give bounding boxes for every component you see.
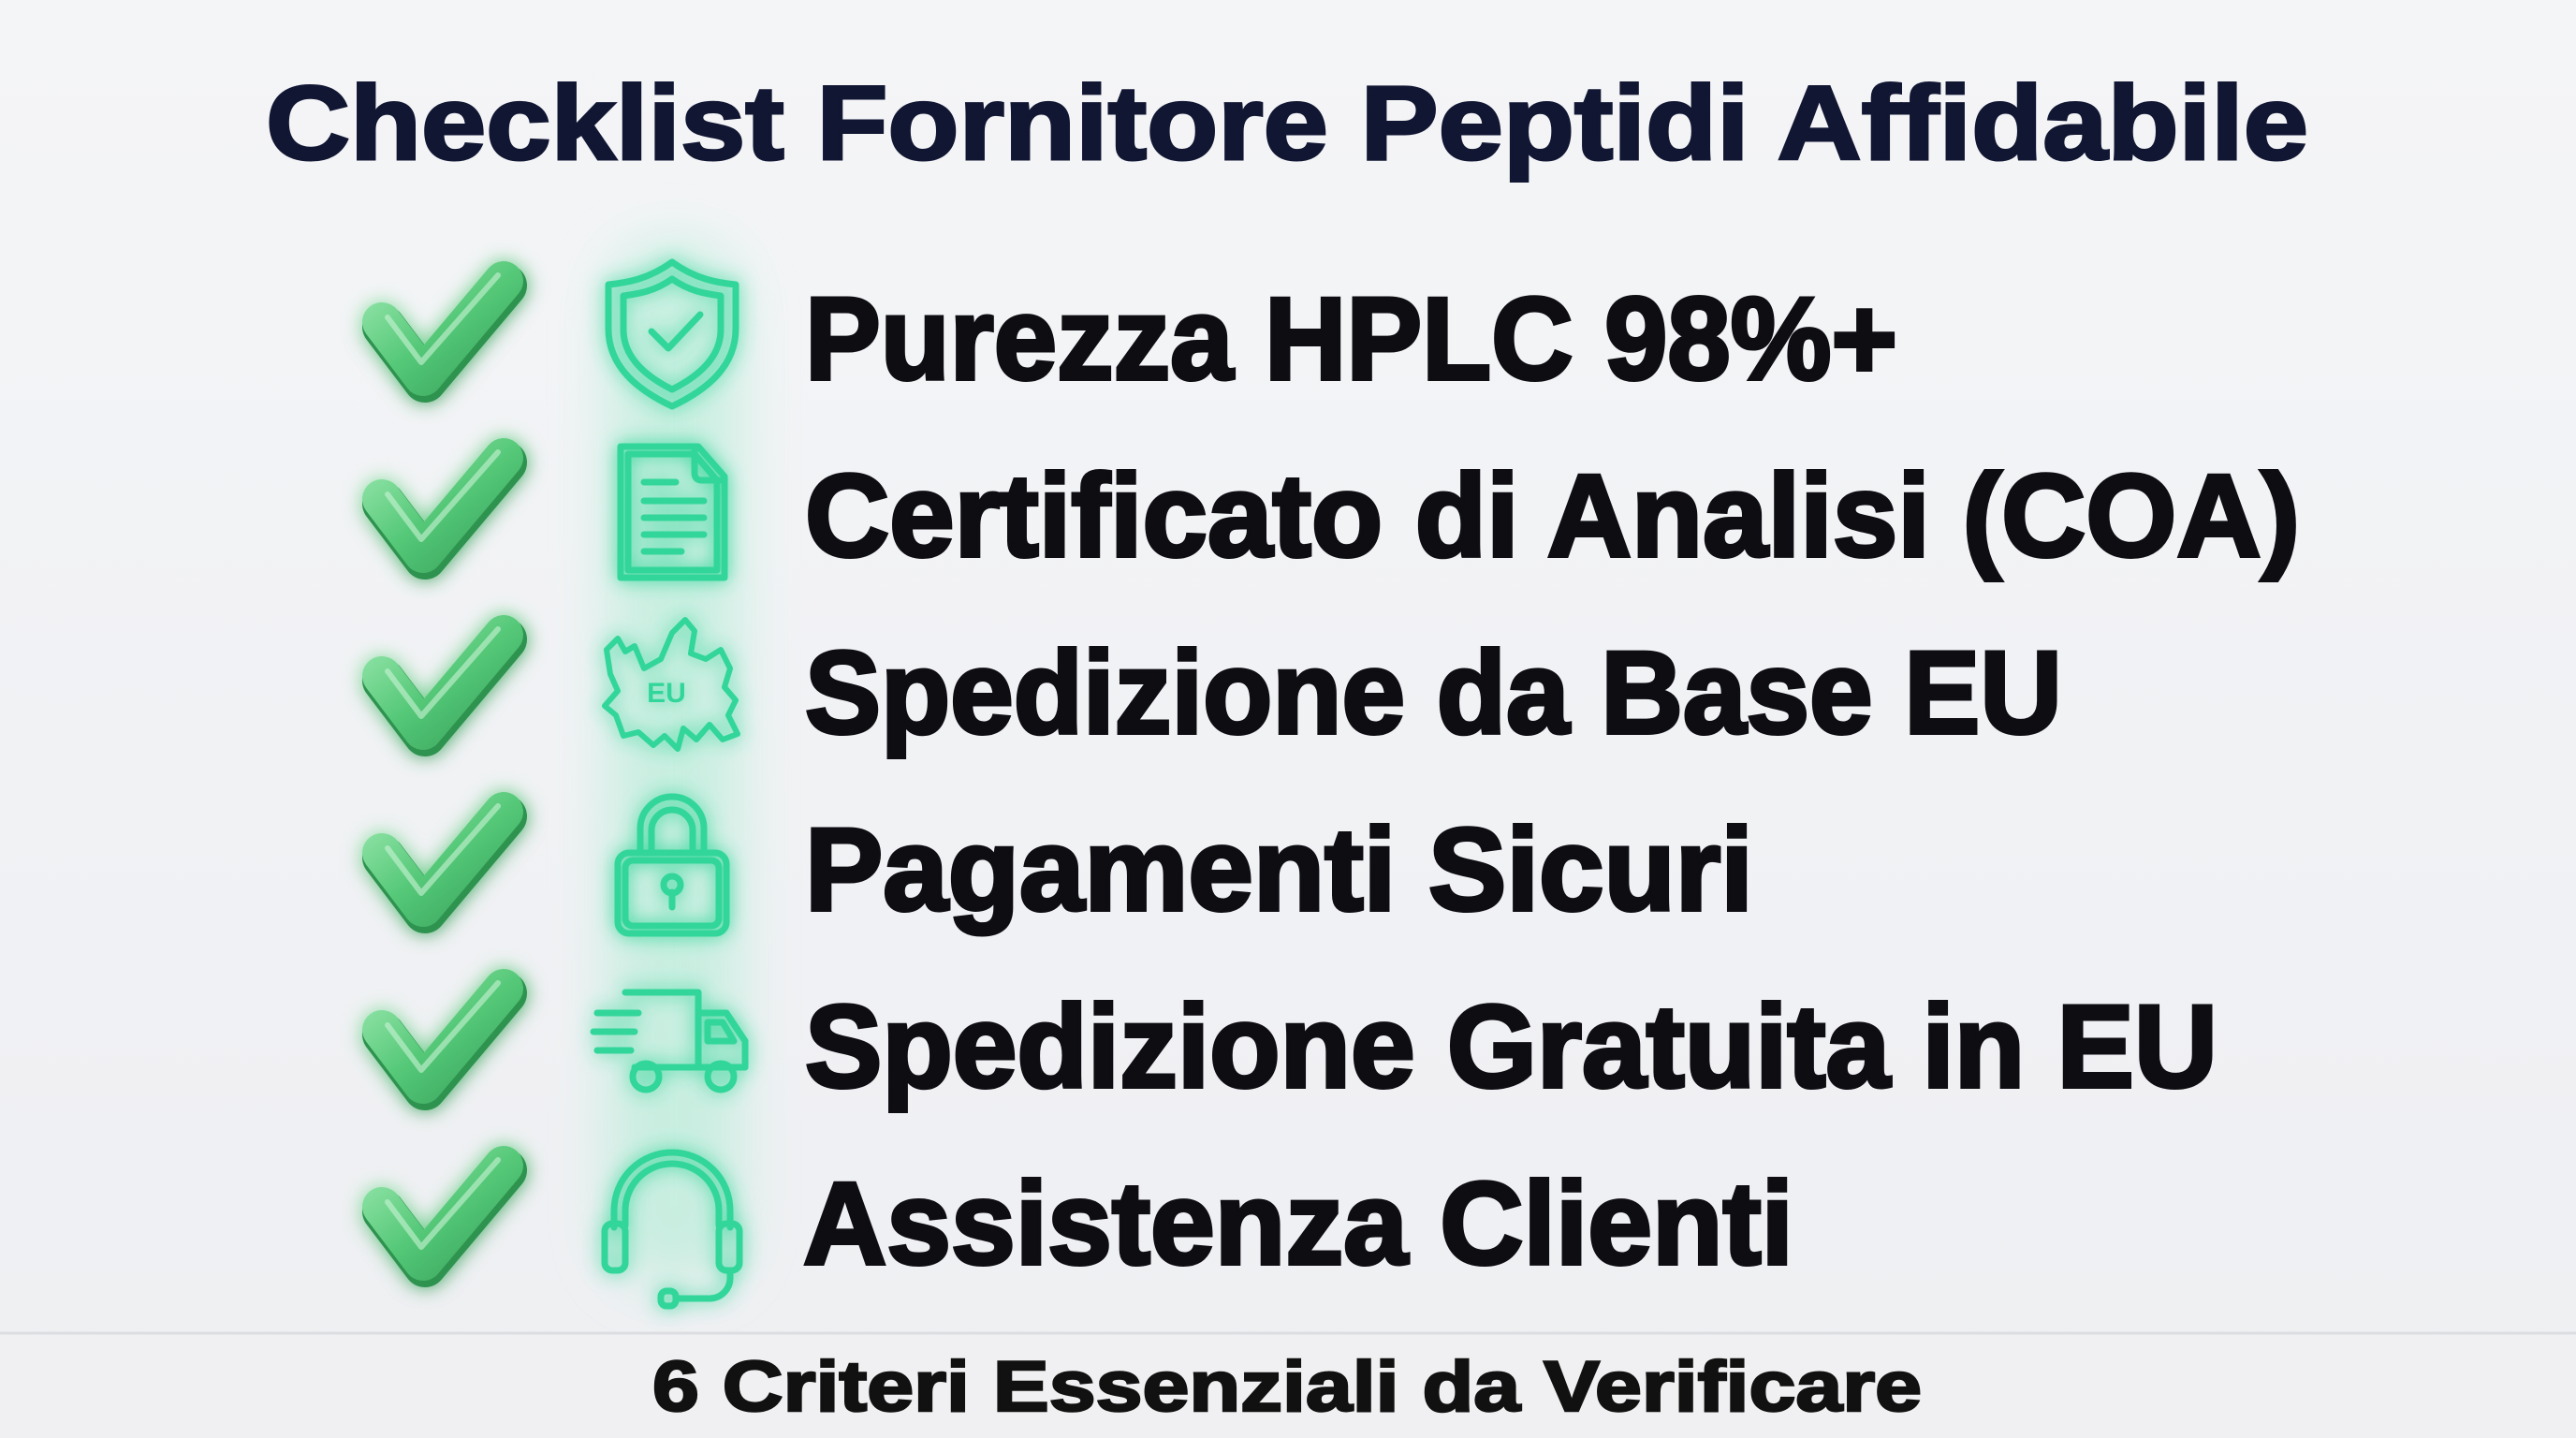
check mark 5 — [382, 983, 505, 1089]
row 4: secure payments — [382, 797, 1753, 935]
icon: truck — [593, 992, 745, 1090]
footer text: 6 Criteri Essenziali da Verificare — [652, 1347, 1922, 1427]
icon: EU map: EU — [647, 678, 686, 709]
icon: shield — [608, 262, 736, 406]
icon: EU map — [605, 620, 738, 749]
icon: headset — [605, 1152, 739, 1306]
title: Checklist Fornitore Peptidi Affidabile — [266, 65, 2308, 182]
check mark 6 — [382, 1160, 505, 1266]
row 2: COA — [382, 447, 2300, 581]
text: row 3: Spedizione da Base EU — [805, 628, 2062, 758]
row 1: purity — [382, 262, 1897, 406]
row 6: customer support — [382, 1152, 1793, 1306]
footer band — [0, 1333, 2576, 1438]
icon: padlock — [618, 797, 726, 933]
check mark 3 — [382, 629, 505, 735]
text: row 5: Spedizione Gratuita in EU — [805, 982, 2217, 1112]
glow band behind icons — [608, 243, 739, 1283]
row 3: EU shipping — [382, 620, 2062, 758]
check mark 4 — [382, 806, 505, 912]
text: row 6: Assistenza Clienti — [803, 1159, 1793, 1289]
text: row 4: Pagamenti Sicuri — [805, 805, 1753, 935]
check mark 1 — [382, 275, 505, 381]
text: row 2: Certificato di Analisi (COA) — [805, 451, 2300, 581]
check mark 2 — [382, 452, 505, 558]
text: row 1: Purezza HPLC 98%+ — [805, 274, 1897, 404]
row 5: free shipping — [382, 982, 2217, 1112]
icon: document — [621, 447, 724, 578]
